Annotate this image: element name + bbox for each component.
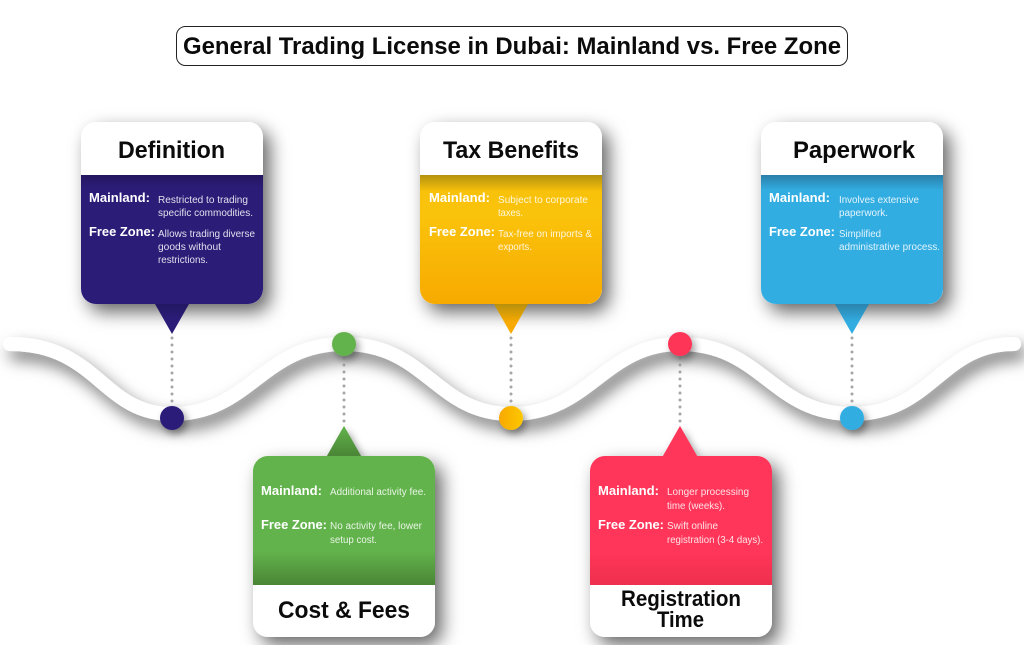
text: cost comparison: setup cost. [330,535,377,546]
marker: paperwork [840,406,864,430]
text: registration comparison: time (weeks). [667,501,725,512]
panel: tax benefits [420,122,602,334]
text: tax comparison: exports. [498,242,532,253]
title [176,26,848,66]
text: paperwork comparison: Involves extensive [839,195,919,206]
text: tax comparison [429,190,592,253]
title: General Trading License in Dubai: Mainland vs. Free Zone [183,33,841,60]
heading: paperwork: Paperwork [793,137,916,164]
text: registration comparison [598,483,763,546]
text: registration comparison: Free Zone: [598,517,664,532]
text: registration comparison: Swift online [667,521,718,532]
text: cost comparison [261,483,426,546]
text: definition comparison [89,190,255,266]
text: definition comparison: Restricted to trading [158,195,248,206]
text: tax comparison: Subject to corporate [498,195,588,206]
text: definition comparison: Free Zone: [89,224,155,239]
heading: registration time [621,586,741,632]
connector: definition [170,338,174,406]
text: definition comparison: Mainland: [89,190,150,205]
heading: definition: Definition [118,137,225,164]
wave timeline [10,344,1014,414]
text: definition comparison: specific commodities. [158,208,253,219]
connector: registration time [678,358,682,426]
connector: tax benefits [510,338,512,406]
text: cost comparison: Free Zone: [261,517,327,532]
text: registration comparison: registration (3-4 days). [667,535,763,546]
text: tax comparison: Free Zone: [429,224,495,239]
text: definition comparison: restrictions. [158,255,208,266]
heading: tax benefits: Tax Benefits [443,137,579,164]
panel: definition [81,122,263,334]
text: paperwork comparison: Free Zone: [769,224,835,239]
text: definition comparison: goods without [158,242,221,253]
connector: cost and fees [342,358,346,426]
text: paperwork comparison: administrative process. [839,242,940,253]
text: cost comparison: Mainland: [261,483,322,498]
text: registration comparison: Mainland: [598,483,659,498]
connector: paperwork [850,338,854,406]
panel: cost and fees [253,426,435,637]
heading: cost and fees: Cost & Fees [278,597,410,624]
text: paperwork comparison: paperwork. [839,208,888,219]
text: tax comparison: Tax-free on imports & [498,229,592,240]
text: paperwork comparison [769,190,940,253]
text: definition comparison: Allows trading diverse [158,229,255,240]
marker: tax benefits [499,406,523,430]
text: tax comparison: Mainland: [429,190,490,205]
panel: registration time [590,426,772,637]
text: paperwork comparison: Simplified [839,229,881,240]
text: registration comparison: Longer processing [667,487,749,498]
text: tax comparison: taxes. [498,208,523,219]
marker: cost and fees [332,332,356,356]
text: cost comparison: No activity fee, lower [330,521,423,532]
panel: paperwork [761,122,943,334]
text: paperwork comparison: Mainland: [769,190,830,205]
text: cost comparison: Additional activity fee. [330,487,426,498]
heading: registration time: Registration [621,586,741,611]
marker: definition [160,406,184,430]
marker: registration time [668,332,692,356]
heading: registration time: Time [657,607,704,632]
